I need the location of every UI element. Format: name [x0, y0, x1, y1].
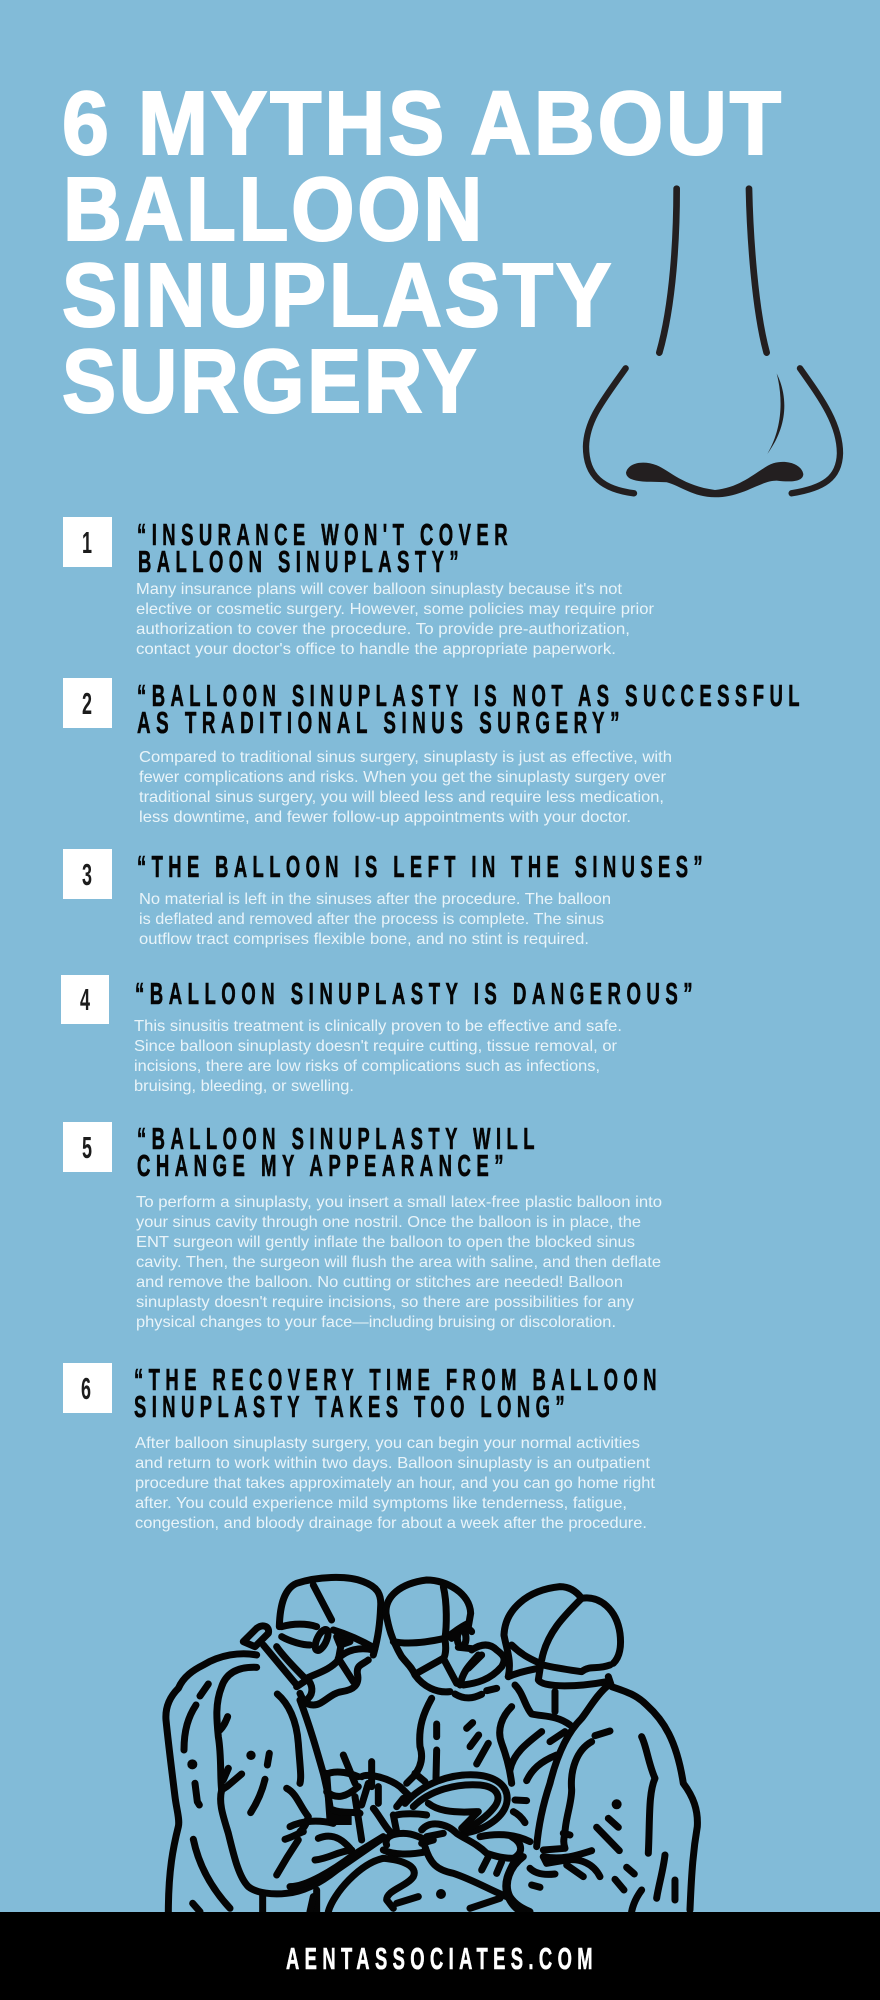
- heading 5: CHANGE MY APPEARANCE”: [137, 1149, 509, 1183]
- title: [62, 74, 784, 432]
- middle surgeon: [386, 1580, 512, 1783]
- myth 2: [63, 678, 805, 826]
- myth 4: [61, 975, 698, 1095]
- heading 5: [137, 1122, 540, 1183]
- body 3: [139, 891, 611, 948]
- title: SURGERY: [62, 332, 479, 432]
- number box 6: [63, 1363, 112, 1413]
- body 4: This sinusitis treatment is clinically proven to be effective and safe.: [134, 1018, 622, 1035]
- body 1: [136, 581, 655, 658]
- body 2: traditional sinus surgery, you will bleed less and require less medication,: [139, 789, 664, 806]
- body 4: incisions, there are low risks of complications such as infections,: [134, 1058, 600, 1075]
- heading 6: SINUPLASTY TAKES TOO LONG”: [134, 1390, 570, 1424]
- body 3: No material is left in the sinuses after the procedure. The balloon: [139, 891, 611, 908]
- body 4: Since balloon sinuplasty doesn't require cutting, tissue removal, or: [134, 1038, 618, 1055]
- myth 1: [63, 517, 655, 658]
- title: SINUPLASTY: [62, 246, 614, 346]
- number box 6: 6: [81, 1372, 91, 1406]
- body 1: authorization to cover the procedure. To provide pre-authorization,: [136, 621, 630, 638]
- heading 6: [134, 1363, 662, 1424]
- body 1: elective or cosmetic surgery. However, some policies may require prior: [136, 601, 655, 618]
- myth 6: [63, 1363, 662, 1532]
- body 4: [134, 1018, 622, 1095]
- body 6: and return to work within two days. Balloon sinuplasty is an outpatient: [135, 1455, 651, 1472]
- right surgeon: [504, 1587, 697, 1913]
- number box 5: [63, 1122, 112, 1172]
- body 6: after. You could experience mild symptoms like tenderness, fatigue,: [135, 1495, 627, 1512]
- left surgeon: [166, 1577, 381, 1913]
- title: 6 MYTHS ABOUT: [62, 74, 784, 174]
- number box 4: 4: [80, 983, 90, 1017]
- footer bar: [0, 1912, 880, 2000]
- title: BALLOON: [63, 160, 485, 260]
- body 4: bruising, bleeding, or swelling.: [134, 1078, 354, 1095]
- body 6: congestion, and bloody drainage for about a week after the procedure.: [135, 1515, 647, 1532]
- number box 5: 5: [82, 1131, 92, 1165]
- number box 3: 3: [82, 858, 92, 892]
- body 2: Compared to traditional sinus surgery, sinuplasty is just as effective, with: [139, 749, 672, 766]
- myth 5: [63, 1122, 662, 1331]
- heading 1: BALLOON SINUPLASTY”: [138, 545, 464, 579]
- body 5: and remove the balloon. No cutting or stitches are needed! Balloon: [136, 1274, 623, 1291]
- body 3: outflow tract comprises flexible bone, and no stint is required.: [139, 931, 589, 948]
- body 2: less downtime, and fewer follow-up appointments with your doctor.: [139, 809, 631, 826]
- heading 1: [137, 518, 513, 579]
- number box 2: 2: [82, 687, 92, 721]
- body 5: cavity. Then, the surgeon will flush the area with saline, and then deflate: [136, 1254, 661, 1271]
- body 5: sinuplasty doesn't require incisions, so there are possibilities for any: [136, 1294, 634, 1311]
- body 2: [139, 749, 672, 826]
- number box 3: [63, 849, 112, 899]
- footer website: AENTASSOCIATES.COM: [286, 1942, 598, 1976]
- body 1: contact your doctor's office to handle the appropriate paperwork.: [136, 641, 616, 658]
- body 2: fewer complications and risks. When you get the sinuplasty surgery over: [139, 769, 667, 786]
- heading 5: “BALLOON SINUPLASTY WILL: [137, 1122, 540, 1156]
- number box 4: [61, 975, 109, 1024]
- body 5: your sinus cavity through one nostril. Once the balloon is in place, the: [136, 1214, 641, 1231]
- body 6: procedure that takes approximately an hour, and you can go home right: [135, 1475, 656, 1492]
- body 6: [135, 1435, 656, 1532]
- icon: nose: [586, 189, 840, 497]
- number box 1: 1: [82, 526, 92, 560]
- body 6: After balloon sinuplasty surgery, you can begin your normal activities: [135, 1435, 640, 1452]
- number box 2: [63, 678, 112, 728]
- body 5: [136, 1194, 662, 1331]
- myth 3: [63, 849, 708, 948]
- tray and hands: [290, 1755, 530, 1912]
- body 1: Many insurance plans will cover balloon sinuplasty because it's not: [136, 581, 623, 598]
- body 5: physical changes to your face—including bruising or discoloration.: [136, 1314, 616, 1331]
- body 3: is deflated and removed after the process is complete. The sinus: [139, 911, 604, 928]
- heading 2: [137, 679, 805, 740]
- illustration: surgeons operating: [166, 1577, 697, 1913]
- body 5: To perform a sinuplasty, you insert a small latex-free plastic balloon into: [136, 1194, 662, 1211]
- number box 1: [63, 517, 112, 567]
- heading 1: “INSURANCE WON'T COVER: [137, 518, 513, 552]
- body 5: ENT surgeon will gently inflate the balloon to open the blocked sinus: [136, 1234, 635, 1251]
